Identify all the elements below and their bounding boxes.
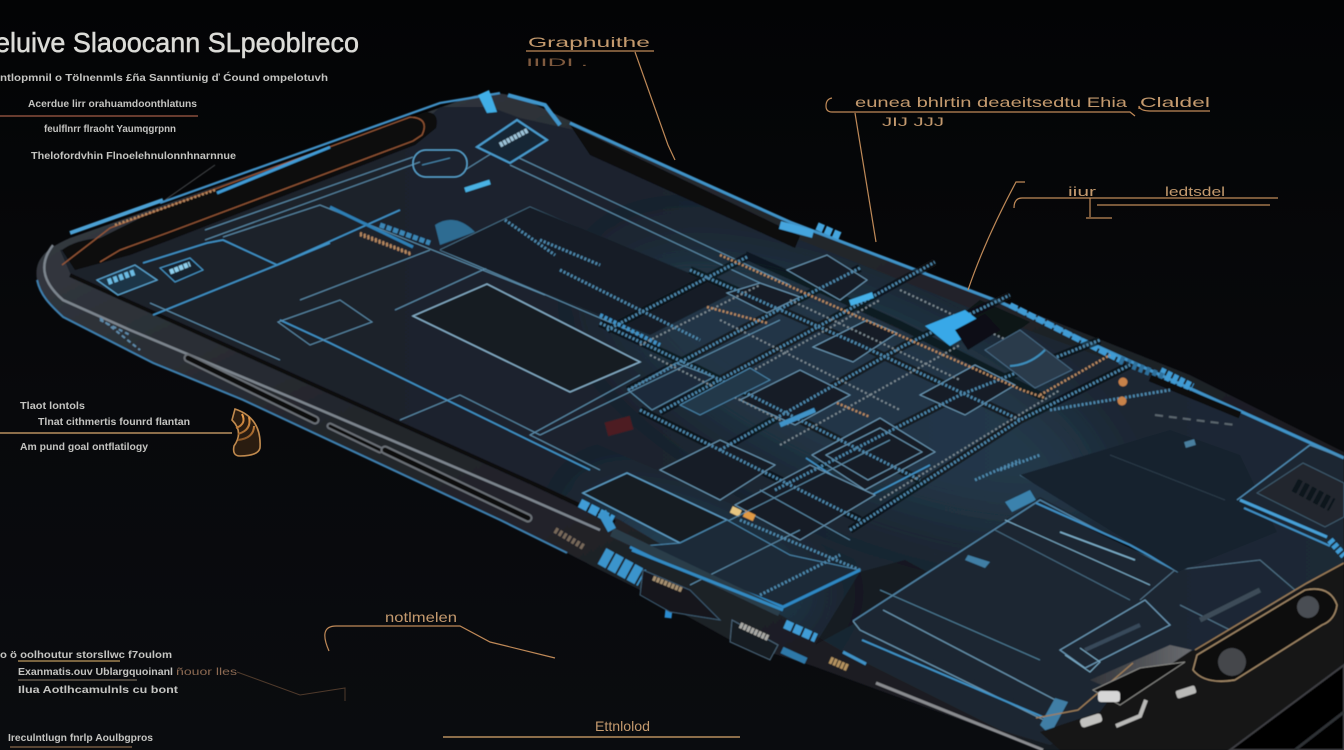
camera oval — [413, 150, 467, 177]
leader line — [635, 52, 675, 160]
flash pill — [1093, 662, 1185, 705]
callout: bottom centre — [325, 609, 555, 658]
callout: right — [968, 182, 1278, 290]
text block: lower-left notes: ñouor lles — [176, 667, 237, 678]
callout: top right: JIJ JJJ — [882, 115, 944, 129]
heading: eluive Slaoocann SLpeoblreco — [0, 27, 359, 58]
orange traces — [720, 255, 1045, 398]
text block: top-left notes — [0, 71, 328, 162]
dark notched parts — [640, 570, 720, 620]
callout: side buttons: Tlnat cithmertis founrd flantan — [38, 416, 190, 428]
leader line — [237, 672, 345, 701]
white marks — [1079, 685, 1197, 728]
right end block — [1237, 445, 1344, 545]
leader line — [968, 182, 1025, 290]
text block: top-left notes: Acerdue lirr orahuamdoonthlatuns — [28, 98, 197, 110]
large dark slab — [1020, 430, 1277, 572]
callout: top right: Claldel — [1140, 94, 1210, 110]
lens large — [1218, 648, 1246, 676]
text block: top-left notes: feulflnrr flraoht Yaumqgrpnn — [44, 123, 176, 135]
text block: lower-left notes: Exanmatis.ouv Ublargquoinanl — [18, 666, 173, 678]
small rectangle — [278, 300, 372, 345]
red marker — [605, 416, 633, 436]
side rails and buttons — [37, 245, 615, 553]
text block: bottom-left note: Ireculntlugn fnrlp Aoulbgpros — [8, 732, 153, 744]
upper rectangle — [440, 207, 735, 335]
callout: top centre — [526, 34, 675, 160]
text block: lower-left notes — [0, 649, 345, 701]
lens small — [1297, 596, 1319, 618]
callout: right: ledtsdel — [1165, 184, 1225, 199]
circuit glow — [574, 193, 1145, 645]
text block: top-left notes: ntlopmnil o Tölnenmls £ña Sanntiunig ď Ćound ompelotuvh — [0, 71, 328, 84]
icon: shell — [232, 409, 260, 456]
top-right rim slot — [570, 123, 1344, 458]
callout: side buttons — [0, 400, 260, 456]
tan outline — [1036, 563, 1344, 718]
small blue components — [97, 182, 600, 295]
glowing blue module — [925, 310, 985, 346]
orange pins — [1118, 378, 1128, 406]
dark board bands — [600, 255, 1130, 530]
gold label — [830, 660, 848, 668]
rear glass and camera — [876, 563, 1344, 750]
leader line — [855, 113, 876, 242]
callout: top right — [826, 94, 1210, 242]
dark shadow under block — [815, 560, 960, 645]
lower board block and clusters — [555, 503, 866, 668]
gold contacts — [730, 506, 756, 521]
text block: top-left notes: Thelofordvhin Flnoelehnulonnhnarnnue — [31, 150, 236, 162]
callout: side buttons: Am pund goal ontflatilogy — [20, 441, 148, 453]
callout: top centre: Graphuithe — [528, 34, 650, 50]
top-left rim slot — [62, 90, 560, 270]
top sensor block — [477, 120, 547, 163]
rear glass — [1040, 563, 1344, 750]
callout: bottom: Ettnlolod — [595, 718, 650, 734]
text block: lower-left notes: Ilua Aotlhcamulnls cu bont — [18, 684, 179, 696]
callout: side buttons: Tlaot lontols — [20, 400, 85, 412]
battery — [853, 497, 1178, 716]
long diagonal lines — [680, 440, 890, 545]
callout: bottom centre: notlmelen — [385, 609, 457, 625]
glossy camera module — [985, 330, 1072, 388]
callout: top right: eunea bhlrtin deaeitsedtu Ehia — [855, 94, 1127, 110]
blue structure lines: left half — [143, 145, 790, 470]
battery and right blocks — [815, 415, 1344, 735]
silver edge — [876, 683, 1043, 750]
strips — [850, 295, 873, 303]
chips — [727, 283, 800, 313]
blue clusters — [580, 503, 613, 520]
dotted traces — [607, 257, 747, 330]
callout: top centre: IIIDI . — [526, 57, 588, 69]
text block: lower-left notes: o ö oolhoutur storsllwc f7oulom — [0, 649, 172, 661]
dense circuit, right half — [540, 255, 1170, 545]
callout: right: iiur — [1068, 184, 1097, 199]
camera island — [1193, 589, 1337, 681]
centre rectangle — [413, 284, 640, 392]
bright board edge — [630, 547, 860, 607]
fine grey traces — [640, 285, 1060, 500]
black wedge — [1230, 665, 1344, 750]
